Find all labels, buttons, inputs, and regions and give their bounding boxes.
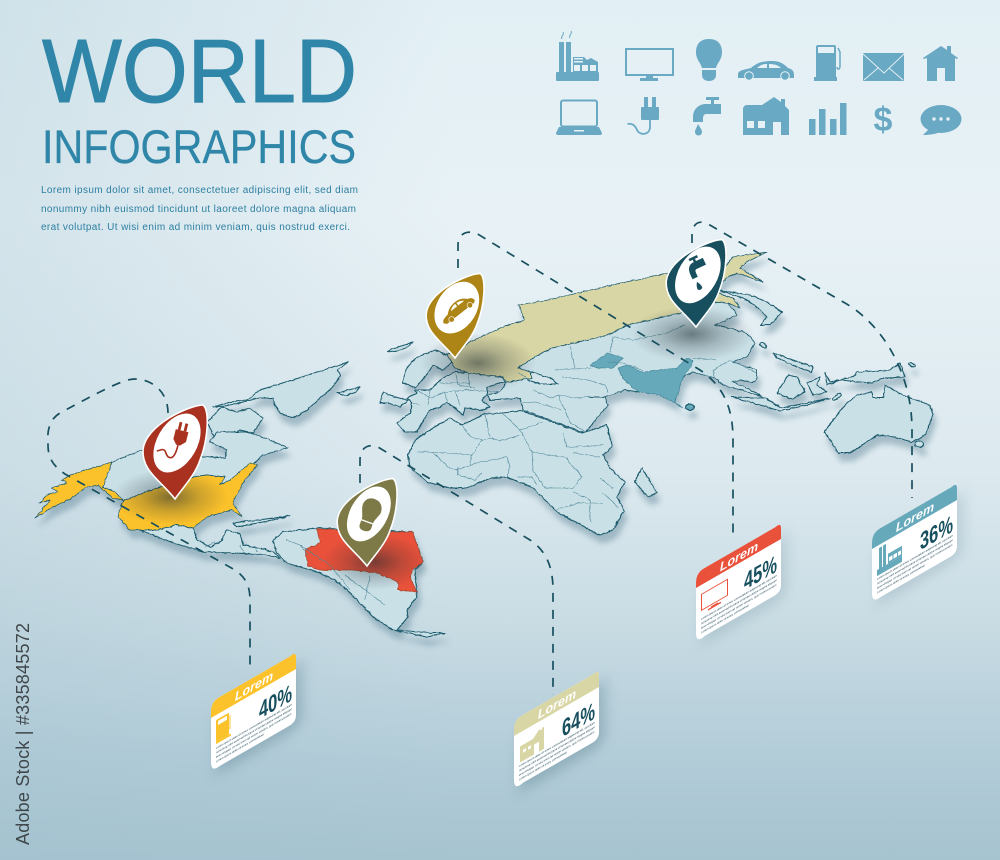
icon: plug xyxy=(628,97,659,134)
icon: house xyxy=(520,727,544,763)
land: New Guinea xyxy=(825,363,905,385)
land: Tasmania xyxy=(914,441,924,447)
icon: bar chart xyxy=(809,103,846,135)
icon set xyxy=(556,31,962,139)
info card: factory 36% xyxy=(872,480,963,609)
icon: house with windows xyxy=(743,97,789,135)
card body text: erat volutpat. Ut wisi enim ad minim veniam, quis nostrud exerci. xyxy=(519,729,595,777)
dashed connectors xyxy=(48,222,912,695)
land: United Kingdom xyxy=(380,392,408,407)
highlight: United States xyxy=(118,463,257,530)
connector: olive pin to tan card xyxy=(360,446,553,695)
land: Timor xyxy=(832,393,842,401)
land: Borneo xyxy=(777,375,805,399)
intro paragraph: nonummy nibh euismod tincidunt ut laoreet dolore magna aliquam xyxy=(41,204,356,215)
percent value: 40% xyxy=(259,680,292,725)
icon: factory xyxy=(877,535,902,576)
card body text: Lorem ipsum dolor sit amet, consectetuer adipiscing elit, sed diam xyxy=(519,720,595,768)
info card: monitor 45% xyxy=(696,520,787,649)
land: Philippines xyxy=(773,353,813,372)
card label: Lorem xyxy=(538,686,576,722)
icon: speech bubble xyxy=(920,105,962,135)
vertical credit line: Adobe Stock | #335845572 xyxy=(13,623,33,845)
icon: fuel pump xyxy=(216,711,231,744)
card body text: nonummy nibh euismod tincidunt ut laoreet dolore magna aliquam xyxy=(701,578,777,626)
card body text: Lorem ipsum dolor sit amet, consectetuer xyxy=(701,603,749,635)
pin shadows xyxy=(112,306,754,590)
land: South America xyxy=(273,528,445,637)
percent value: 36% xyxy=(920,511,953,556)
intro paragraph: erat volutpat. Ut wisi enim ad minim veniam, quis nostrud exerci. xyxy=(41,222,350,233)
card body text: nonummy nibh euismod tincidunt ut laoreet dolore magna aliquam xyxy=(519,725,595,773)
percent value: 64% xyxy=(562,698,595,743)
land: Canada xyxy=(98,432,288,500)
card body text: Lorem ipsum dolor sit amet, consectetuer xyxy=(519,750,567,782)
info card: house 64% xyxy=(514,667,605,796)
icon: factory xyxy=(556,31,599,81)
icon: dollar sign: $ xyxy=(874,101,893,139)
percent value: 45% xyxy=(744,551,777,596)
land: Scandinavia xyxy=(402,350,455,388)
land: East Asian islands xyxy=(717,290,782,325)
connector: teal pin to teal card xyxy=(692,222,912,498)
card body text: Lorem ipsum dolor sit amet, consectetuer adipiscing elit, sed diam xyxy=(216,702,292,750)
connector: red pin to yellow card xyxy=(48,379,250,672)
card body text: Lorem ipsum dolor sit amet, consectetuer adipiscing elit, sed diam xyxy=(877,533,953,581)
icon: light bulb xyxy=(696,39,722,81)
card body text: Lorem ipsum dolor sit amet, consectetuer xyxy=(877,563,925,595)
card body text: erat volutpat. Ut wisi enim ad minim veniam, quis nostrud exerci. xyxy=(701,582,777,630)
card body text: Lorem ipsum dolor sit amet, consectetuer xyxy=(216,732,264,764)
highlight: Russia xyxy=(447,252,767,382)
land: Sri Lanka xyxy=(686,404,694,410)
land: Middle East and Asia xyxy=(487,302,763,433)
card body text: Lorem ipsum dolor sit amet, consectetuer adipiscing elit, sed diam xyxy=(701,573,777,621)
icon: house xyxy=(923,46,958,81)
icon: monitor xyxy=(702,579,728,614)
land: Madagascar xyxy=(635,468,657,497)
land: Mexico and Central America xyxy=(140,525,280,558)
title xyxy=(42,22,357,173)
pin: car (gold) xyxy=(425,273,488,358)
highlight: India xyxy=(618,358,693,408)
highlight: Central Asia xyxy=(590,353,623,368)
icon: car xyxy=(738,61,794,80)
connector: gold pin to red card xyxy=(458,232,733,540)
land: Europe xyxy=(397,372,505,432)
land: Sulawesi xyxy=(807,377,827,395)
land: Cuba xyxy=(233,516,290,527)
internal country borders xyxy=(205,325,757,605)
title: INFOGRAPHICS xyxy=(42,120,356,173)
highlight: Brazil xyxy=(305,529,423,592)
icon: laptop xyxy=(556,100,602,135)
icon: envelope xyxy=(863,53,904,81)
card body text: nonummy nibh euismod tincidunt ut laoreet dolore magna aliquam xyxy=(216,707,292,755)
intro paragraph xyxy=(41,185,358,233)
world map xyxy=(35,252,933,637)
icon: monitor xyxy=(626,49,673,81)
land: Africa xyxy=(408,411,625,535)
icon: water tap xyxy=(693,97,721,136)
card label: Lorem xyxy=(235,668,273,704)
pin: electricity plug (red) xyxy=(143,405,210,499)
pin: light bulb (olive) xyxy=(337,479,400,566)
land: Australia xyxy=(824,385,933,453)
card body text: erat volutpat. Ut wisi enim ad minim veniam, quis nostrud exerci. xyxy=(877,542,953,590)
land: small Pacific island xyxy=(908,363,916,367)
card label: Lorem xyxy=(896,499,934,535)
card label: Lorem xyxy=(720,539,758,574)
land: Arctic islands xyxy=(207,407,263,438)
intro paragraph: Lorem ipsum dolor sit amet, consectetuer adipiscing elit, sed diam xyxy=(41,185,358,196)
land: Greenland xyxy=(213,362,348,418)
card body text: nonummy nibh euismod tincidunt ut laoreet dolore magna aliquam xyxy=(877,538,953,586)
card body text: erat volutpat. Ut wisi enim ad minim veniam, quis nostrud exerci. xyxy=(216,711,292,759)
title: WORLD xyxy=(42,22,357,122)
land: Iceland xyxy=(387,342,413,352)
info card: fuel 40% xyxy=(211,649,302,778)
land: Taiwan xyxy=(758,341,768,349)
highlight: Alaska xyxy=(35,462,123,518)
land: Iceland near Greenland xyxy=(337,387,360,396)
pin: water tap (teal) xyxy=(666,239,730,327)
land: Caspian Sea xyxy=(528,372,558,384)
icon: fuel pump xyxy=(814,45,840,81)
land: Sumatra and Java xyxy=(732,397,830,411)
